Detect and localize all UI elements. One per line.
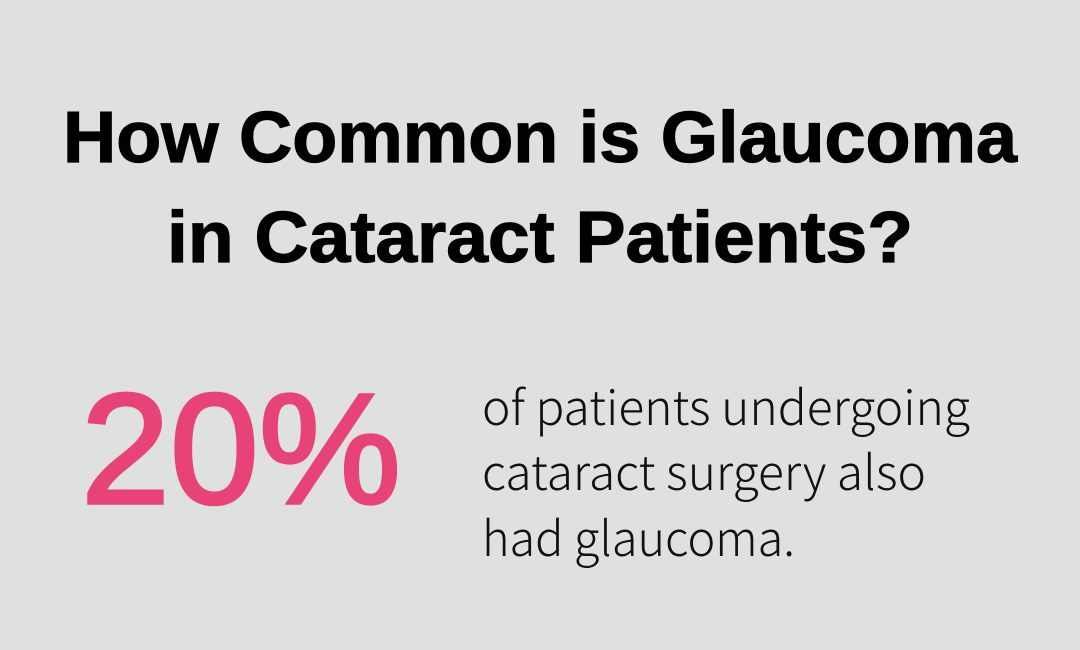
description text: had glaucoma.: [482, 500, 795, 570]
description text: cataract surgery also: [482, 434, 926, 504]
title: How Common is Glaucoma: [63, 98, 1018, 178]
description text: [482, 369, 970, 570]
title: [63, 98, 1018, 278]
description text: of patients undergoing: [482, 369, 970, 439]
big statistic: 20%: 20%: [81, 362, 401, 537]
title: in Cataract Patients?: [167, 198, 913, 278]
